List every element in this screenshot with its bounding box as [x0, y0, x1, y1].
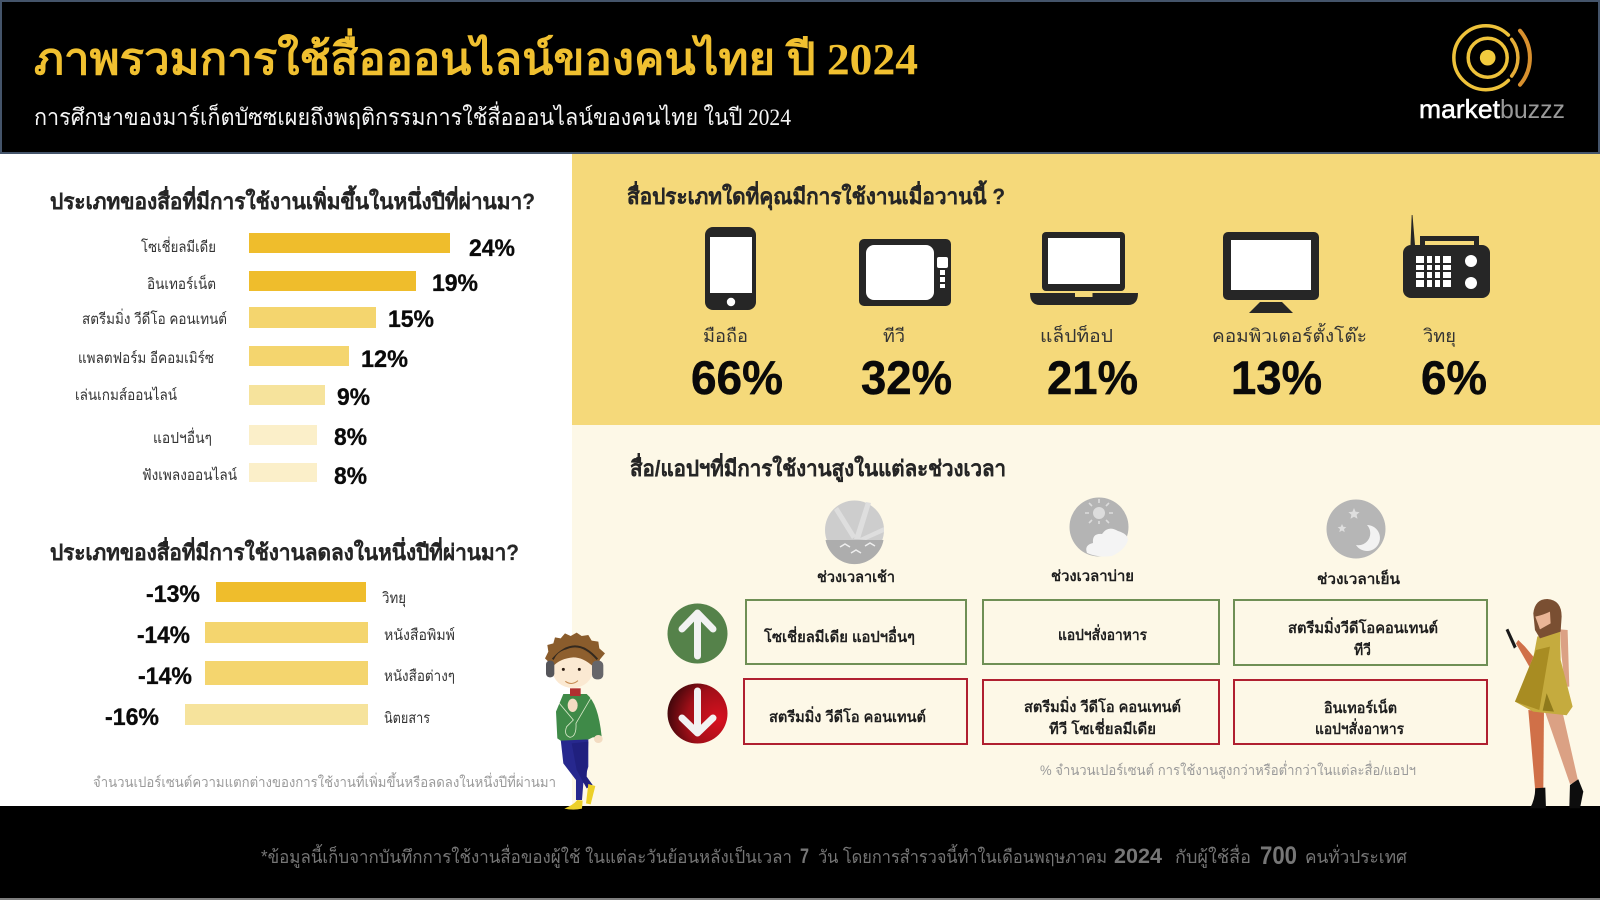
panel: header	[1, 1, 1599, 153]
bar chart: decreased: วิทยุ	[381, 590, 406, 608]
heading: yesterday: สื่อประเภทใดที่คุณมีการใช้งานเมื่อวานนี้ ?	[627, 180, 1005, 211]
bar chart: decreased: นิตยสาร	[384, 710, 430, 727]
time labels: ช่วงเวลาเย็น	[1317, 569, 1401, 588]
footer note: คนทั่วประเทศ	[1305, 844, 1408, 867]
logo: marketbuzzz: buzzz	[1500, 94, 1565, 124]
icon: laptop	[1030, 232, 1138, 305]
icon: evening	[1326, 500, 1386, 558]
box text: lower usage: ทีวี โซเชี่ยลมีเดีย	[1049, 718, 1156, 738]
illustration: woman with phone	[1506, 599, 1583, 808]
bar chart: increased: แอปฯอื่นๆ	[153, 427, 212, 447]
panel: footer	[0, 806, 1600, 900]
icon: radio	[1403, 215, 1490, 298]
box text: higher usage: แอปฯสั่งอาหาร	[1058, 624, 1148, 644]
device percentages: 13%	[1231, 351, 1322, 404]
bar chart: increased: อินเทอร์เน็ต	[147, 274, 216, 293]
bar chart: increased: เล่นเกมส์ออนไลน์	[75, 386, 177, 404]
device labels: ทีวี	[883, 326, 905, 346]
box text: lower usage: แอปฯสั่งอาหาร	[1315, 718, 1405, 738]
icon: up arrow	[668, 604, 728, 664]
time labels: ช่วงเวลาบ่าย	[1051, 568, 1134, 585]
panel: media usage decreased	[50, 536, 556, 790]
bar chart: increased: ฟังเพลงออนไลน์	[142, 466, 237, 484]
panel: media usage increased	[50, 185, 535, 490]
bar chart: increased: 15%	[388, 306, 434, 333]
footnote: left: จำนวนเปอร์เซนต์ความแตกต่างของการใช้งานที่เพิ่มขึ้นหรือลดลงในหนึ่งปีที่ผ่านมา	[93, 772, 556, 790]
panel: cream time of day	[572, 425, 1600, 806]
box text: higher usage	[763, 617, 1438, 659]
footer note: 700	[1260, 842, 1297, 870]
time labels	[817, 568, 1401, 588]
footer note: 7	[800, 845, 809, 868]
box text: lower usage: สตรีมมิ่ง วีดีโอ คอนเทนต์	[1024, 696, 1181, 716]
footer note: กับผู้ใช้สื่อ	[1175, 844, 1251, 868]
panel: time of day content	[630, 452, 1487, 779]
subtitle: การศึกษาของมาร์เก็ตบัซซเผยถึงพฤติกรรมการใช้สื่อออนไลน์ของคนไทย ในปี 2024	[34, 101, 791, 130]
illustration: boy with headphones	[545, 633, 605, 810]
bar chart: increased: 12%	[361, 346, 408, 373]
bar chart: increased: สตรีมมิ่ง วีดีโอ คอนเทนต์	[82, 308, 227, 328]
box text: higher usage: ทีวี	[1354, 642, 1371, 659]
footer note: *ข้อมูลนี้เก็บจากบันทึกการใช้งานสื่อของผู้ใช้ ในแต่ละวันย้อนหลังเป็นเวลา	[261, 844, 792, 868]
box text: lower usage: สตรีมมิ่ง วีดีโอ คอนเทนต์	[769, 706, 926, 726]
bar chart: decreased: -14%	[137, 622, 190, 649]
icon: down arrow	[668, 684, 728, 744]
icon: tv	[859, 239, 951, 306]
panel: white left background	[0, 154, 572, 806]
logo: marketbuzzz	[1419, 26, 1565, 124]
box text: lower usage	[769, 696, 1405, 738]
bar chart: decreased: หนังสือต่างๆ	[384, 668, 455, 685]
device labels: มือถือ	[703, 326, 748, 346]
device percentages: 21%	[1047, 351, 1138, 404]
icon: desktop computer	[1223, 232, 1319, 313]
bar chart: decreased: -16%	[105, 704, 159, 731]
heading: increased: ประเภทของสื่อที่มีการใช้งานเพิ่มขึ้นในหนึ่งปีที่ผ่านมา?	[50, 185, 535, 214]
icon: afternoon	[1070, 498, 1128, 557]
footer note: วัน โดยการสำรวจนี้ทำในเดือนพฤษภาคม	[818, 844, 1107, 867]
device labels: วิทยุ	[1423, 326, 1456, 347]
device percentages: 66%	[691, 351, 783, 404]
panel: yellow device usage	[572, 154, 1600, 425]
boxes: higher usage	[746, 600, 1487, 665]
bar chart: increased: แพลตฟอร์ม อีคอมเมิร์ซ	[78, 350, 214, 367]
logo: marketbuzzz: market	[1419, 94, 1501, 124]
box text: higher usage: โซเชี่ยลมีเดีย แอปฯอื่นๆ	[763, 626, 915, 646]
device percentages: 6%	[1421, 351, 1487, 404]
box text: higher usage: สตรีมมิ่งวีดีโอคอนเทนต์	[1288, 617, 1438, 637]
time labels: ช่วงเวลาเช้า	[817, 569, 895, 586]
bar chart: increased: 24%	[469, 235, 515, 262]
device percentages: 32%	[861, 351, 952, 404]
bar chart: decreased: -14%	[138, 663, 192, 690]
device labels: แล็ปท็อป	[1040, 324, 1113, 346]
icon: phone	[705, 227, 756, 310]
bar chart: increased: โซเชี่ยลมีเดีย	[141, 236, 216, 256]
device labels	[703, 323, 1456, 347]
bar chart: decreased	[105, 581, 455, 731]
boxes: lower usage	[744, 679, 1487, 744]
icon: morning	[825, 500, 884, 564]
device percentages	[691, 351, 1487, 404]
footer note	[261, 842, 1408, 870]
heading: decreased: ประเภทของสื่อที่มีการใช้งานลดลงในหนึ่งปีที่ผ่านมา?	[50, 536, 519, 565]
device labels: คอมพิวเตอร์ตั้งโต๊ะ	[1212, 323, 1367, 346]
bar chart: increased: 8%	[334, 463, 367, 490]
title: ภาพรวมการใช้สื่อออนไลน์ของคนไทย ปี 2024	[34, 28, 918, 84]
bar chart: increased: 19%	[432, 270, 478, 297]
footer note: 2024	[1114, 845, 1162, 868]
bar chart: increased	[75, 233, 515, 490]
panel: yesterday device usage content	[627, 180, 1490, 404]
bar chart: increased: 8%	[334, 424, 367, 451]
footnote: right: % จำนวนเปอร์เซนต์ การใช้งานสูงกว่าหรือต่ำกว่าในแต่ละสื่อ/แอปฯ	[1040, 761, 1416, 779]
bar chart: increased: 9%	[337, 384, 370, 411]
heading: time of day: สื่อ/แอปฯที่มีการใช้งานสูงในแต่ละช่วงเวลา	[630, 452, 1006, 483]
bar chart: decreased: หนังสือพิมพ์	[384, 627, 455, 644]
bar chart: decreased: -13%	[146, 581, 200, 608]
box text: lower usage: อินเทอร์เน็ต	[1324, 698, 1397, 717]
